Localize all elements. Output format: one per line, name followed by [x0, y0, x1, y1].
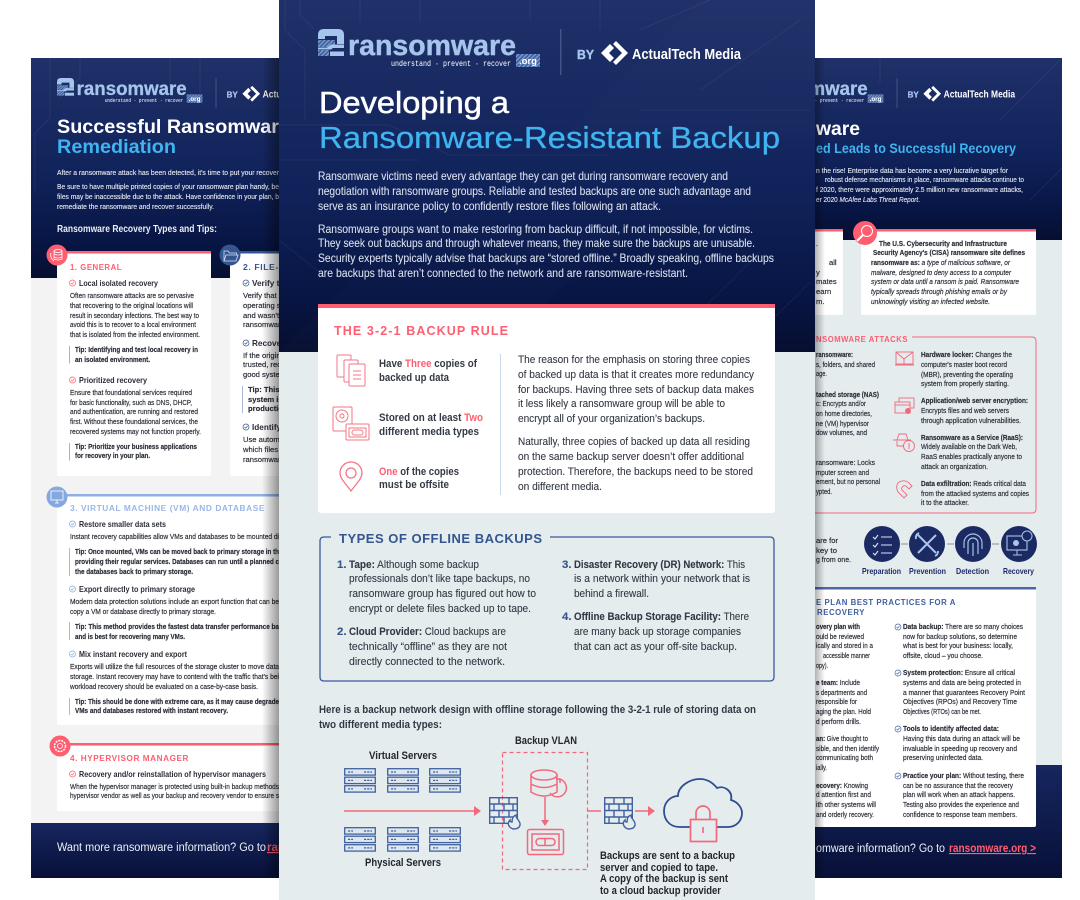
icon: preparation checklist: [864, 526, 900, 562]
text block: rule explanation: for backups. Having three sets of backup data makes: [518, 384, 754, 396]
text block: right page intro: robust defense mechanisms in place, ransomware attacks continue to: [825, 175, 1024, 184]
card: CISA definition: malware, designed to deny access to a computer: [871, 268, 1011, 277]
card: CISA definition: system or data until a ransom is paid. Ransomware: [871, 277, 1019, 286]
text block: two media types: [379, 412, 483, 438]
footer: left page: [31, 823, 291, 878]
card: 3. Virtual machine and database: Export directly to primary storage: [79, 585, 195, 594]
card: 3. Virtual machine and database: workload recovery should be evaluated on a case-by-case basis.: [69, 682, 258, 691]
icon: virtual servers: [345, 769, 460, 792]
card: partial definition card: .: [816, 239, 818, 248]
list: tape and cloud provider: Tape: Although some backup: [349, 559, 479, 571]
text block: RaaS: RaaS enables practically anyone to: [921, 452, 1022, 461]
text block: one offsite copy: One of the copies: [379, 466, 459, 478]
text block: remediation intro: [57, 168, 279, 235]
text block: best practices left column: ould be reviewed: [816, 632, 864, 641]
logo: ransomware.org left page: .org: [189, 96, 201, 103]
card: 3. Virtual machine and database: the databases back to primary storage.: [75, 567, 193, 576]
text block: best practices left column: d perform drills.: [816, 717, 861, 726]
icon: backup database: [531, 770, 566, 797]
text block: prepare note: g from one.: [816, 555, 851, 564]
text block: best practices left column: communicating both: [816, 753, 873, 762]
text block: best practices left column: aging the plan. Hold: [816, 707, 871, 716]
heading: Successful Ransomware Remediation: Successful Ransomwar: [57, 117, 280, 138]
text block: best practices right column: Having this data during an attack will be: [903, 734, 1020, 743]
heading: right page title: [815, 119, 1016, 156]
list: disaster recovery and offline facility: 3.: [562, 559, 572, 571]
list: tape and cloud provider: 2.: [337, 626, 346, 638]
text block: intro paragraphs: Security experts typically advise that backups are “stored offline.” Broadly speaking, offline backups: [318, 252, 774, 265]
card: 2. File-level: ransomware: [243, 455, 285, 464]
card: 1. General: Tip: Identifying and test local recovery in: [75, 345, 198, 354]
text block: best practices left column: d attention first and: [816, 790, 871, 799]
icon: magnet: [897, 481, 912, 498]
process: preparation, prevention, detection, recovery: Detection: [956, 566, 989, 576]
card: the 3-2-1 backup rule: THE 3-2-1 BACKUP RULE: [334, 324, 508, 338]
card: 3. Virtual machine and database: VMs and databases restored with instant recovery.: [75, 706, 228, 715]
card: 2. File-level: Recover: [252, 339, 285, 348]
text block: rule explanation: it less likely a ransomware group will be able to: [518, 398, 725, 410]
icon: physical servers: [345, 828, 460, 851]
heading: right page title: ware: [815, 119, 860, 140]
logo: ransomware.org right page: [758, 78, 1016, 108]
text block: remediation intro: Ransomware Recovery Types and Tips:: [57, 224, 217, 235]
text block: RaaS: Ransomware as a Service (RaaS):: [921, 433, 1023, 442]
card: 2. File-level: system iso: [248, 395, 288, 404]
text block: best practices right column: preserving uninfected data.: [903, 753, 983, 762]
panel: right page, ransomware defense: [758, 58, 1062, 878]
card: 1. General: Often ransomware attacks are so pervasive: [70, 291, 194, 300]
card: 2. File-level: Verify th: [252, 279, 284, 288]
text block: three copies: [379, 358, 477, 384]
logo: ransomware.org left page: ActualTech Media: [263, 90, 335, 101]
card: partial definition card: [800, 229, 843, 315]
text block: best practices left column: e team: Include: [816, 678, 860, 687]
panel: types of offline backups: TYPES OF OFFLINE BACKUPS: [339, 531, 542, 546]
logo: ransomware.org center page: ransomware: [348, 30, 516, 62]
process: preparation, prevention, detection, recovery: Recovery: [1003, 566, 1034, 576]
text block: data exfiltration: Data exfiltration: Reads critical data: [921, 479, 1027, 488]
text block: right page intro: f 2020, there were approximately 2.5 million new ransomware attacks,: [816, 185, 1023, 194]
list: disaster recovery and offline facility: Disaster Recovery (DR) Network: This: [574, 559, 745, 571]
list: disaster recovery and offline facility: behind a firewall.: [574, 588, 649, 600]
logo: ransomware.org center page: understand · prevent · recover: [391, 59, 511, 69]
card: 2. File-level: [220, 244, 300, 476]
text block: rule explanation: encrypt all of your organization’s backups.: [518, 413, 705, 425]
process: preparation, prevention, detection, recovery: Preparation: [862, 566, 901, 576]
text block: RaaS: [921, 433, 1023, 471]
footer: right page: omware information? Go to: [816, 843, 945, 855]
card: 2. File-level: Identify: [252, 423, 282, 432]
card: partial definition card: m.: [816, 297, 824, 306]
text block: attack types left column: mputer screen and: [816, 468, 869, 477]
text block: best practices right column: offsite, cloud – you choose.: [903, 651, 983, 660]
text block: attack types left column: ement, but no personal: [816, 477, 880, 486]
text block: remediation intro: Be sure to have multiple printed copies of your ransomware plan handy, be: [57, 182, 279, 191]
icon: prevention tools: [909, 526, 945, 562]
card: 1. General: result in secondary infections. The best way to: [70, 311, 199, 320]
card: CISA definition: The U.S. Cybersecurity and Infrastructure: [879, 239, 1007, 248]
card: 3. Virtual machine and database: Tip: Once mounted, VMs can be moved back to primary storage in th: [75, 547, 279, 556]
text block: two media types: different media types: [379, 426, 479, 438]
icon: tape: [528, 830, 564, 854]
text block: hardware locker: computer's master boot record: [921, 360, 1007, 369]
icon: ransomware as a service: [893, 434, 914, 452]
card: CISA definition: unknowingly visiting an infected website.: [871, 297, 990, 306]
text block: right page intro: n the rise! Enterprise data has become a very lucrative target for: [816, 166, 1008, 175]
card: 1. General: avoid this is to recover to a local environment: [70, 320, 197, 329]
text block: best practices right column: what is best for your business: locally,: [902, 641, 1013, 650]
process: preparation, prevention, detection, recovery: Prevention: [909, 566, 946, 576]
text block: one offsite copy: must be offsite: [379, 479, 449, 491]
text block: data exfiltration: [921, 479, 1029, 507]
card: 3. Virtual machine and database: and is best for recovering many VMs.: [75, 632, 185, 641]
logo: ransomware.org left page: BY: [227, 90, 238, 100]
text block: best practices right column: now for backup solutions, so determine: [903, 632, 1017, 641]
text block: attack types left column: tached storage (NAS): [816, 390, 879, 399]
list: tape and cloud provider: directly connected to the network.: [349, 656, 505, 668]
arrow: firewall to cloud: [635, 806, 655, 816]
card: 1. General: [46, 244, 211, 476]
text block: right page intro: er 2020 McAfee Labs Threat Report.: [816, 195, 920, 204]
text block: best practices right column: invaluable in speeding up recovery and: [903, 744, 1017, 753]
arrow: database to tape: [541, 797, 549, 826]
logo: ransomware.org right page: understand · prevent · recover: [786, 97, 864, 104]
card: 3. Virtual machine and database: 3. VIRTUAL MACHINE (VM) AND DATABASE: [70, 503, 265, 513]
card: response plan best practices: [800, 587, 1036, 827]
logo: ransomware.org center page: BY: [577, 47, 594, 62]
card: 4. Hypervisor manager: Recovery and/or reinstallation of hypervisor managers: [79, 770, 266, 779]
card: 1. General: and authentication, are running and restored: [70, 407, 198, 416]
text block: remediation intro: After a ransomware attack has been detected, it's time to put your recover: [57, 168, 279, 177]
diagram: backup network: Physical Servers: [365, 857, 441, 869]
text block: hardware locker: Hardware locker: Changes the: [921, 350, 1012, 359]
list: disaster recovery and offline facility: [562, 559, 750, 653]
list: disaster recovery and offline facility: is a network within your network that is: [574, 573, 750, 585]
logo: ransomware.org center page: ActualTech Media: [632, 46, 742, 63]
list: tape and cloud provider: technically “offline” as they are not: [349, 641, 508, 653]
logo: ransomware.org right page: .org: [870, 96, 882, 103]
card: 3. Virtual machine and database: copy a VM or database directly to primary storage.: [70, 607, 216, 616]
panel: ransomware attacks: [800, 334, 1036, 513]
title: Ransomware-Resistant Backup: [319, 120, 780, 155]
footer: left page: Want more ransomware information? Go to: [57, 842, 266, 854]
text block: application encryption: Application/web server encryption:: [921, 396, 1028, 405]
list: tape and cloud provider: professionals don’t like tape backups, no: [349, 573, 530, 585]
text block: rule explanation: Naturally, three copies of backed up data all residing: [518, 436, 750, 448]
icon: recovery monitor: [1001, 526, 1037, 562]
text block: diagram caption: to a cloud backup provider: [600, 885, 721, 897]
text block: best practices right column: a manner that guarantees Recovery Point: [903, 688, 1026, 697]
text block: network design intro: Here is a backup network design with offline storage following the 3-2-1 rule of storing data on: [319, 704, 756, 716]
text block: best practices left column: ically and stored in a: [816, 641, 874, 650]
text block: attack types left column: ransomware: Locks: [816, 458, 875, 467]
text block: attack types left column: age.: [816, 369, 827, 378]
card: 2. File-level: good system: [243, 370, 286, 379]
card: 3. Virtual machine and database: Restore smaller data sets: [79, 520, 166, 529]
text block: best practices left column: [816, 622, 879, 819]
text block: intro paragraphs: Ransomware victims need every advantage they can get during ransomware recovery and: [318, 170, 728, 183]
text block: prepare note: [816, 536, 851, 564]
card: 1. General: for basic functionality, such as DNS, DHCP,: [70, 398, 192, 407]
text block: remediation intro: remediate the ransomware and recover successfully.: [57, 202, 214, 211]
card: CISA definition: Security Agency's (CISA) ransomware site defines: [873, 248, 1025, 257]
text block: rule explanation: on the same backup server doesn’t offer additional: [518, 451, 744, 463]
card: 1. General: that is isolated from the infected environment.: [70, 330, 200, 339]
text block: best practices left column: ecovery: Knowing: [816, 781, 868, 790]
footer: left page: ran: [267, 842, 285, 854]
text block: one offsite copy: [379, 466, 459, 491]
text block: three copies: Have Three copies of: [379, 358, 477, 370]
text block: best practices right column: Tools to identify affected data:: [903, 724, 999, 733]
logo: ransomware.org right page: ransomware: [758, 79, 868, 100]
card: 2. File-level: and wasn't c: [243, 311, 285, 320]
text block: attack types left column: c: Encrypts and/or: [816, 399, 866, 408]
logo: ransomware.org left page: ransomware: [77, 79, 187, 100]
diagram: backup network: Backup VLAN: [515, 735, 577, 747]
title: Developing a: [319, 85, 510, 120]
text block: attack types left column: ypted.: [816, 487, 832, 496]
text block: intro paragraphs: negotiation with ransomware groups. Reliable and tested backups are one such advantage and: [318, 185, 751, 198]
text block: best practices left column: sible, and then identify: [816, 744, 879, 753]
text block: hardware locker: [921, 350, 1013, 388]
card: 3. Virtual machine and database: Exports will utilize the full resources of the storage cluster to move data: [70, 662, 280, 671]
text block: network design intro: [319, 704, 756, 731]
logo: ransomware.org left page: understand · prevent · recover: [105, 97, 183, 104]
text block: best practices right column: Objectives (RTOs) can be met.: [903, 707, 981, 716]
card: 1. General: first. Without these foundational services, the: [70, 417, 198, 426]
panel: types of offline backups: [320, 531, 774, 681]
card: CISA definition: [853, 221, 1036, 315]
card: 4. Hypervisor manager: hypervisor vendor as well as your backup and recovery vendor to ensure s: [70, 791, 279, 800]
text block: intro paragraphs: [318, 170, 774, 280]
card: the 3-2-1 backup rule: [318, 304, 775, 513]
list: tape and cloud provider: ransomware group has figured out how to: [349, 588, 536, 600]
text block: data exfiltration: it to the attacker.: [921, 498, 969, 507]
text block: best practices right column: can be no assurance that the recovery: [903, 781, 1013, 790]
card: 4. Hypervisor manager: 4. HYPERVISOR MANAGER: [70, 753, 189, 763]
text block: application encryption: Encrypts files and web servers: [921, 406, 1009, 415]
card: 2. File-level: ransomware: [243, 320, 285, 329]
logo: ransomware.org right page: BY: [908, 90, 919, 100]
text block: intro paragraphs: serve as an insurance policy to confidently restore files following an attack.: [318, 200, 661, 213]
diagram: backup network: Virtual Servers: [369, 750, 437, 762]
list: disaster recovery and offline facility: that can act as your off-site backup.: [574, 641, 737, 653]
text block: prepare note: key to: [816, 546, 837, 555]
panel: ransomware attacks: NSOMWARE ATTACKS: [816, 334, 908, 344]
text block: data exfiltration: from the attacked systems and copies: [921, 489, 1029, 498]
footer: right page: [800, 765, 1062, 878]
logo: ransomware.org left page: [57, 78, 335, 108]
logo: ransomware.org center page: .org: [519, 56, 537, 67]
text block: rule explanation: The reason for the emphasis on storing three copies: [518, 354, 750, 366]
backup VLAN dashed box: [502, 752, 588, 870]
card: 2. File-level: production: [248, 404, 288, 413]
list: tape and cloud provider: 1.: [337, 559, 346, 571]
text block: attack types left column: ne (VM) hypervisor: [816, 419, 869, 428]
text block: best practices left column: responsible for: [816, 697, 857, 706]
card: 3. Virtual machine and database: providing their regular services. Databases can run until a planned c: [75, 557, 279, 566]
card: 1. General: Local isolated recovery: [79, 279, 158, 288]
heading: Successful Ransomware Remediation: Remediation: [57, 137, 176, 158]
text block: best practices right column: Testing also provides the experience and: [903, 800, 1019, 809]
text block: attack types left column: dow volumes, and: [816, 428, 867, 437]
heading: right page title: ed Leads to Successful Recovery: [816, 141, 1016, 156]
text block: attack types left column: on home directories,: [816, 409, 872, 418]
text block: best practices left column: and orderly recovery.: [816, 810, 874, 819]
card: 2. File-level: Use automa: [243, 435, 285, 444]
card: partial definition card: y: [816, 268, 820, 277]
text block: remediation intro: files may be inaccessible due to the attack. Have confidence in your plan, b: [57, 192, 279, 201]
text block: two media types: Stored on at least Two: [379, 412, 483, 424]
card: 4. Hypervisor manager: [50, 736, 297, 811]
text block: three copies: backed up data: [379, 372, 449, 384]
text block: hardware locker: (MBR), preventing the operating: [921, 370, 1013, 379]
card: 4. Hypervisor manager: When the hypervisor manager is protected using built-in backup methods: [70, 782, 279, 791]
list: tape and cloud provider: Cloud Provider: Cloud backups are: [349, 626, 506, 638]
icon: cloud with lock: [664, 779, 742, 842]
card: 2. File-level: operating sy: [243, 301, 285, 310]
icon: firewall to VLAN: [490, 798, 520, 829]
text block: RaaS: attack an organization.: [921, 462, 988, 471]
list: disaster recovery and offline facility: are many back up storage companies: [574, 626, 741, 638]
card: 3. Virtual machine and database: Mix instant recovery and export: [79, 650, 187, 659]
text block: diagram caption: [600, 850, 735, 897]
card: 2. File-level: which files w: [242, 445, 286, 454]
text block: diagram caption: Backups are sent to a backup: [600, 850, 735, 862]
text block: attack types left column: s, folders, and shared: [816, 360, 875, 369]
text block: best practices right column: systems and data are being protected in: [903, 678, 1021, 687]
text block: best practices right column: Practice your plan: Without testing, there: [903, 771, 1024, 780]
card: 1. General: 1. GENERAL: [70, 262, 122, 272]
text block: best practices left column: ith other systems will: [816, 800, 876, 809]
text block: best practices right column: confidence to response team members.: [903, 810, 1017, 819]
icon: three document copies: [337, 355, 365, 386]
card: 2. File-level: trusted, reco: [243, 360, 285, 369]
text block: diagram caption: server and copied to tape.: [600, 862, 718, 874]
icon: detection fingerprint: [955, 526, 991, 562]
text block: prepare note: are for: [816, 536, 838, 545]
text block: best practices left column: an: Give thought to: [816, 734, 868, 743]
text block: best practices left column: accessible manner: [823, 651, 870, 660]
icon: magnifier with question mark: [853, 221, 877, 245]
text block: RaaS: Widely available on the Dark Web,: [921, 442, 1017, 451]
text block: intro paragraphs: They seek out backups and through whatever means, they make sure the backups are unusable.: [318, 237, 755, 250]
icon: general recovery database: [46, 244, 68, 266]
icon: folder: [220, 244, 240, 266]
icon: application windows: [895, 398, 914, 414]
icon: gear: [50, 736, 70, 756]
card: 3. Virtual machine and database: Tip: This should be done with extreme care, as it may cause degrade: [75, 697, 279, 706]
process: preparation, prevention, detection, recovery: [862, 526, 1037, 576]
icon: hardware locker laptop: [895, 352, 914, 365]
text block: best practices left column: opy).: [816, 661, 828, 670]
title: [319, 85, 780, 155]
card: CISA definition: ransomware as: a type of malicious software, or: [871, 258, 1010, 267]
card: 1. General: that recovering to the original locations will: [70, 301, 193, 310]
icon: location pin: [340, 462, 362, 491]
text block: best practices left column: s departments and: [816, 688, 867, 697]
card: response plan best practices: E PLAN BEST PRACTICES FOR A: [816, 597, 956, 607]
text block: best practices right column: [895, 622, 1026, 819]
list: disaster recovery and offline facility: Offline Backup Storage Facility: There: [574, 611, 749, 623]
card: 1. General: recovered systems may not function properly.: [70, 427, 201, 436]
list: disaster recovery and offline facility: 4.: [562, 611, 572, 623]
panel: left page, ransomware remediation: [31, 58, 335, 878]
text block: rule explanation: protection. Therefore, the backups need to be stored: [518, 466, 753, 478]
card: 3. Virtual machine and database: Instant recovery capabilities allow VMs and databases to be mounted di: [70, 532, 279, 541]
diagram: backup network: [344, 735, 742, 897]
footer: right page: ransomware.org >: [949, 843, 1036, 855]
card: 1. General: Prioritized recovery: [79, 376, 147, 385]
card: CISA definition: typically spreads through phishing emails or by: [871, 287, 1008, 296]
text block: best practices right column: Data backup: There are so many choices: [903, 622, 1023, 631]
card: 2. File-level: Verify that th: [243, 291, 285, 300]
card: partial definition card: mates: [816, 277, 837, 286]
text block: application encryption: [921, 396, 1028, 425]
icon: firewall to cloud: [605, 798, 635, 829]
text block: right page intro: [816, 166, 1024, 204]
text block: intro paragraphs: Ransomware groups want to make restoring from backup difficult, if not impossible, for victims.: [318, 223, 753, 236]
icon: monitor: [46, 486, 68, 508]
text block: attack types left column: ransomware:: [816, 350, 853, 359]
card: 3. Virtual machine and database: [46, 486, 297, 725]
text block: rule explanation: of backed up data is that it creates more redundancy: [518, 369, 754, 381]
text block: best practices right column: Objectives (RPOs) and Recovery Time: [903, 697, 1017, 706]
list: tape and cloud provider: [337, 559, 536, 668]
card: 1. General: Ensure that foundational services required: [70, 388, 192, 397]
card: partial definition card: all: [829, 258, 837, 267]
card: 2. File-level: 2. FILE-: [243, 262, 279, 272]
card: 2. File-level: Tip: This m: [248, 385, 289, 394]
text block: diagram caption: A copy of the backup is sent: [600, 873, 728, 885]
text block: attack types left column: [816, 350, 880, 496]
card: 3. Virtual machine and database: storage. Instant recovery may have to contend with the traffic that's bei: [70, 672, 279, 681]
arrow: servers to firewall: [344, 806, 481, 816]
text block: best practices right column: plan will work when an attack happens.: [903, 790, 1015, 799]
card: 2. File-level: If the origina: [243, 351, 286, 360]
card: 1. General: an isolated environment.: [75, 355, 150, 364]
card: 1. General: for recovery in your plan.: [75, 451, 150, 460]
text block: network design intro: two different media types:: [319, 719, 442, 731]
shadow: center page edges: [262, 58, 825, 878]
logo: ransomware.org center page: [318, 29, 742, 75]
text block: rule explanation: on different media.: [518, 481, 602, 493]
card: 3. Virtual machine and database: Tip: This method provides the fastest data transfer performance ba: [75, 622, 280, 631]
card: partial definition card: earn: [816, 287, 831, 296]
text block: best practices right column: System protection: Ensure all critical: [903, 668, 1015, 677]
text block: application encryption: through application vulnerabilities.: [921, 416, 1021, 425]
text block: intro paragraphs: are backups that aren’t connected to the network and are ransomware-resistant.: [318, 267, 688, 280]
text block: best practices left column: overy plan with: [816, 622, 860, 631]
text block: rule explanation: [518, 354, 754, 493]
logo: ransomware.org right page: ActualTech Media: [944, 90, 1016, 101]
panel: center page, developing a ransomware-resistant backup: [279, 0, 815, 900]
card: response plan best practices: RECOVERY: [817, 607, 865, 617]
icon: disk and tape media: [333, 407, 369, 440]
text block: best practices left column: ially.: [816, 763, 827, 772]
card: 3. Virtual machine and database: Modern data protection solutions include an export function that can be: [70, 597, 279, 606]
card: 1. General: Tip: Prioritize your business applications: [75, 442, 197, 451]
heading: Successful Ransomware Remediation: [57, 117, 280, 158]
text block: hardware locker: system from properly starting.: [921, 379, 1009, 388]
list: tape and cloud provider: encrypt or delete files backed up to tape.: [349, 603, 531, 615]
